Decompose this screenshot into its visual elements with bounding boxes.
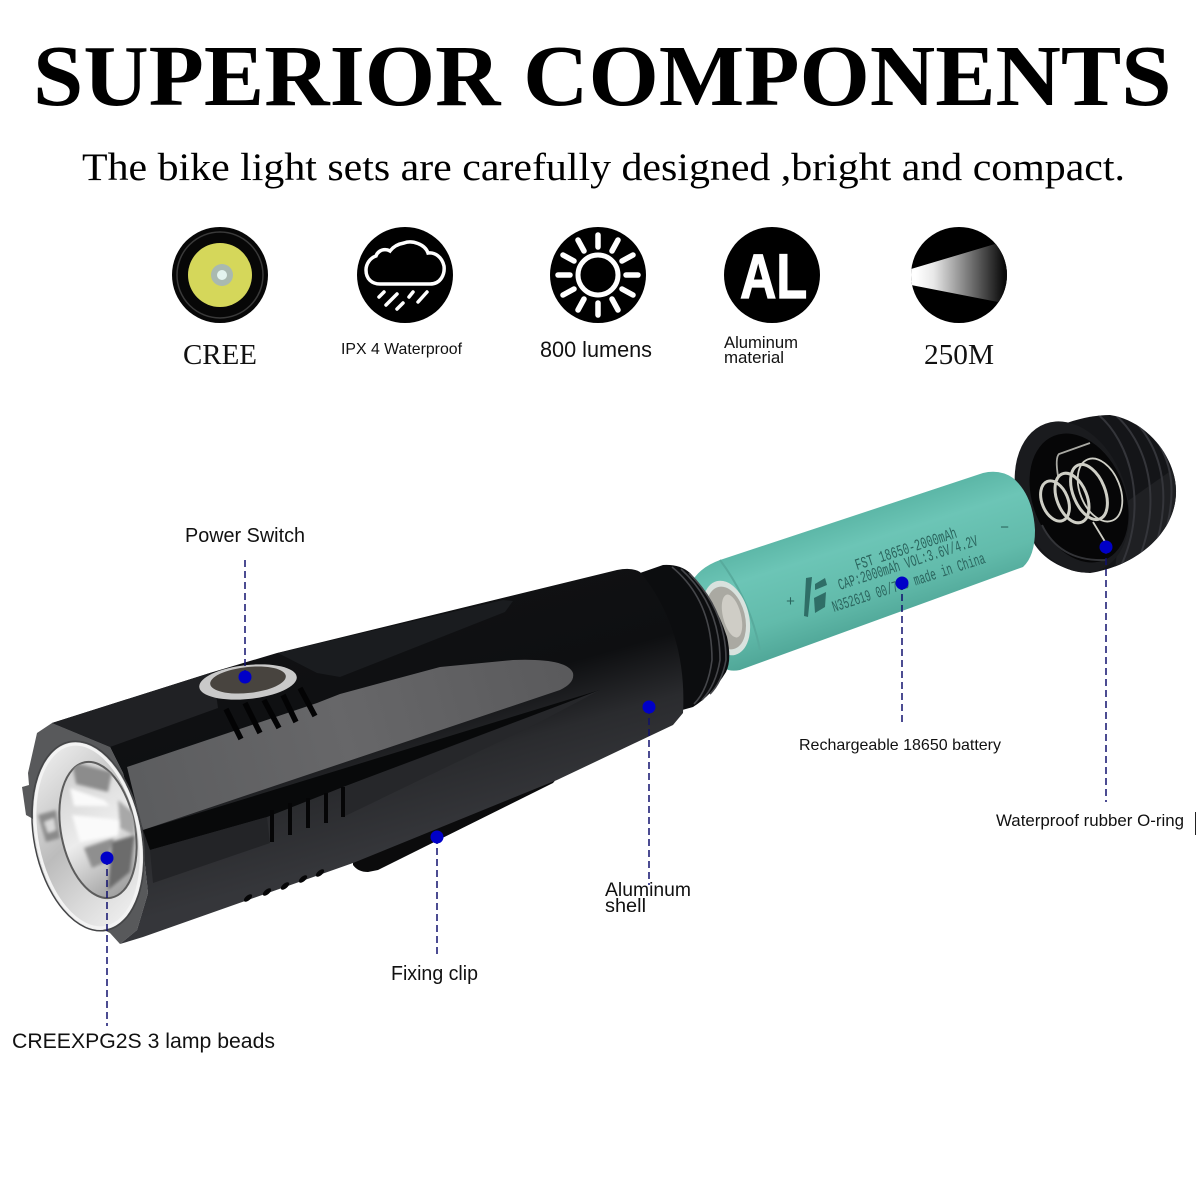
feature: range bbox=[911, 227, 1008, 371]
callout: power switch: Power Switch bbox=[185, 525, 305, 547]
battery terminal bbox=[694, 576, 758, 660]
reflector bbox=[58, 760, 138, 900]
battery markings: N352619 00/789 made in China bbox=[830, 550, 988, 617]
bottom vents bbox=[243, 868, 325, 903]
feature: brightness bbox=[540, 227, 652, 362]
label: CREE: CREE bbox=[183, 340, 257, 371]
callout: O-ring: Waterproof rubber O-ring bbox=[996, 811, 1184, 830]
battery markings bbox=[786, 520, 1009, 617]
icon: rain cloud bbox=[357, 227, 453, 323]
main shell bbox=[52, 569, 683, 944]
rear cap with spring bbox=[1014, 415, 1176, 573]
label: 250M: 250M bbox=[924, 340, 994, 371]
side grip ribs bbox=[272, 787, 343, 842]
battery markings: FST 18650-2000mAh bbox=[853, 525, 959, 575]
callout: lamp beads: CREEXPG2S 3 lamp beads bbox=[12, 1030, 275, 1053]
label: 800 lumens: 800 lumens bbox=[540, 337, 652, 362]
callout: power switch bbox=[185, 525, 305, 684]
title: SUPERIOR COMPONENTS bbox=[33, 29, 1172, 125]
top facet bbox=[52, 672, 218, 747]
battery markings: CAP:2000mAh VOL:3.6V/4.2V bbox=[836, 532, 981, 595]
subtitle: The bike light sets are carefully designed ,bright and compact. bbox=[82, 145, 1125, 189]
feature: aluminum bbox=[724, 227, 820, 367]
callout: aluminum shell: shell bbox=[605, 896, 646, 917]
black groove bbox=[143, 690, 600, 850]
power switch bbox=[197, 660, 299, 704]
callout: battery: Rechargeable 18650 battery bbox=[799, 737, 1001, 754]
top vents bbox=[226, 688, 315, 739]
callout: aluminum shell: Aluminum bbox=[605, 880, 691, 901]
lower panel left bbox=[150, 817, 270, 883]
callout: O-ring bbox=[996, 540, 1196, 835]
icon: AL: AL bbox=[740, 242, 807, 312]
icon: sun bbox=[550, 227, 646, 323]
label: Aluminum material bbox=[724, 334, 798, 367]
callout: lamp beads bbox=[12, 852, 275, 1053]
battery bbox=[690, 472, 1035, 671]
label: IPX 4 Waterproof: IPX 4 Waterproof bbox=[341, 341, 463, 358]
callout: aluminum shell bbox=[605, 700, 691, 917]
flashlight body bbox=[17, 569, 683, 944]
callout: battery bbox=[799, 576, 1001, 754]
feature: CREE bbox=[172, 227, 268, 371]
battery markings: − bbox=[1000, 520, 1009, 537]
exploded flashlight bbox=[17, 405, 1180, 944]
battery logo bbox=[804, 577, 827, 617]
label: Aluminum material: material bbox=[724, 349, 784, 367]
icon: CREE LED bbox=[172, 227, 268, 323]
thread collar bbox=[640, 565, 729, 712]
label: Aluminum material: Aluminum bbox=[724, 334, 798, 352]
feature: waterproof bbox=[341, 227, 463, 358]
callout: fixing clip bbox=[391, 830, 478, 985]
lower panel right bbox=[343, 690, 600, 817]
fixing clip bbox=[353, 777, 558, 872]
gray facet bbox=[127, 660, 573, 830]
lens ring bbox=[31, 740, 145, 932]
top slot bbox=[278, 600, 513, 677]
callout: fixing clip: Fixing clip bbox=[391, 963, 478, 985]
battery markings: + bbox=[786, 594, 795, 611]
front bezel bbox=[22, 723, 148, 944]
icon: light beam bbox=[911, 227, 1008, 323]
